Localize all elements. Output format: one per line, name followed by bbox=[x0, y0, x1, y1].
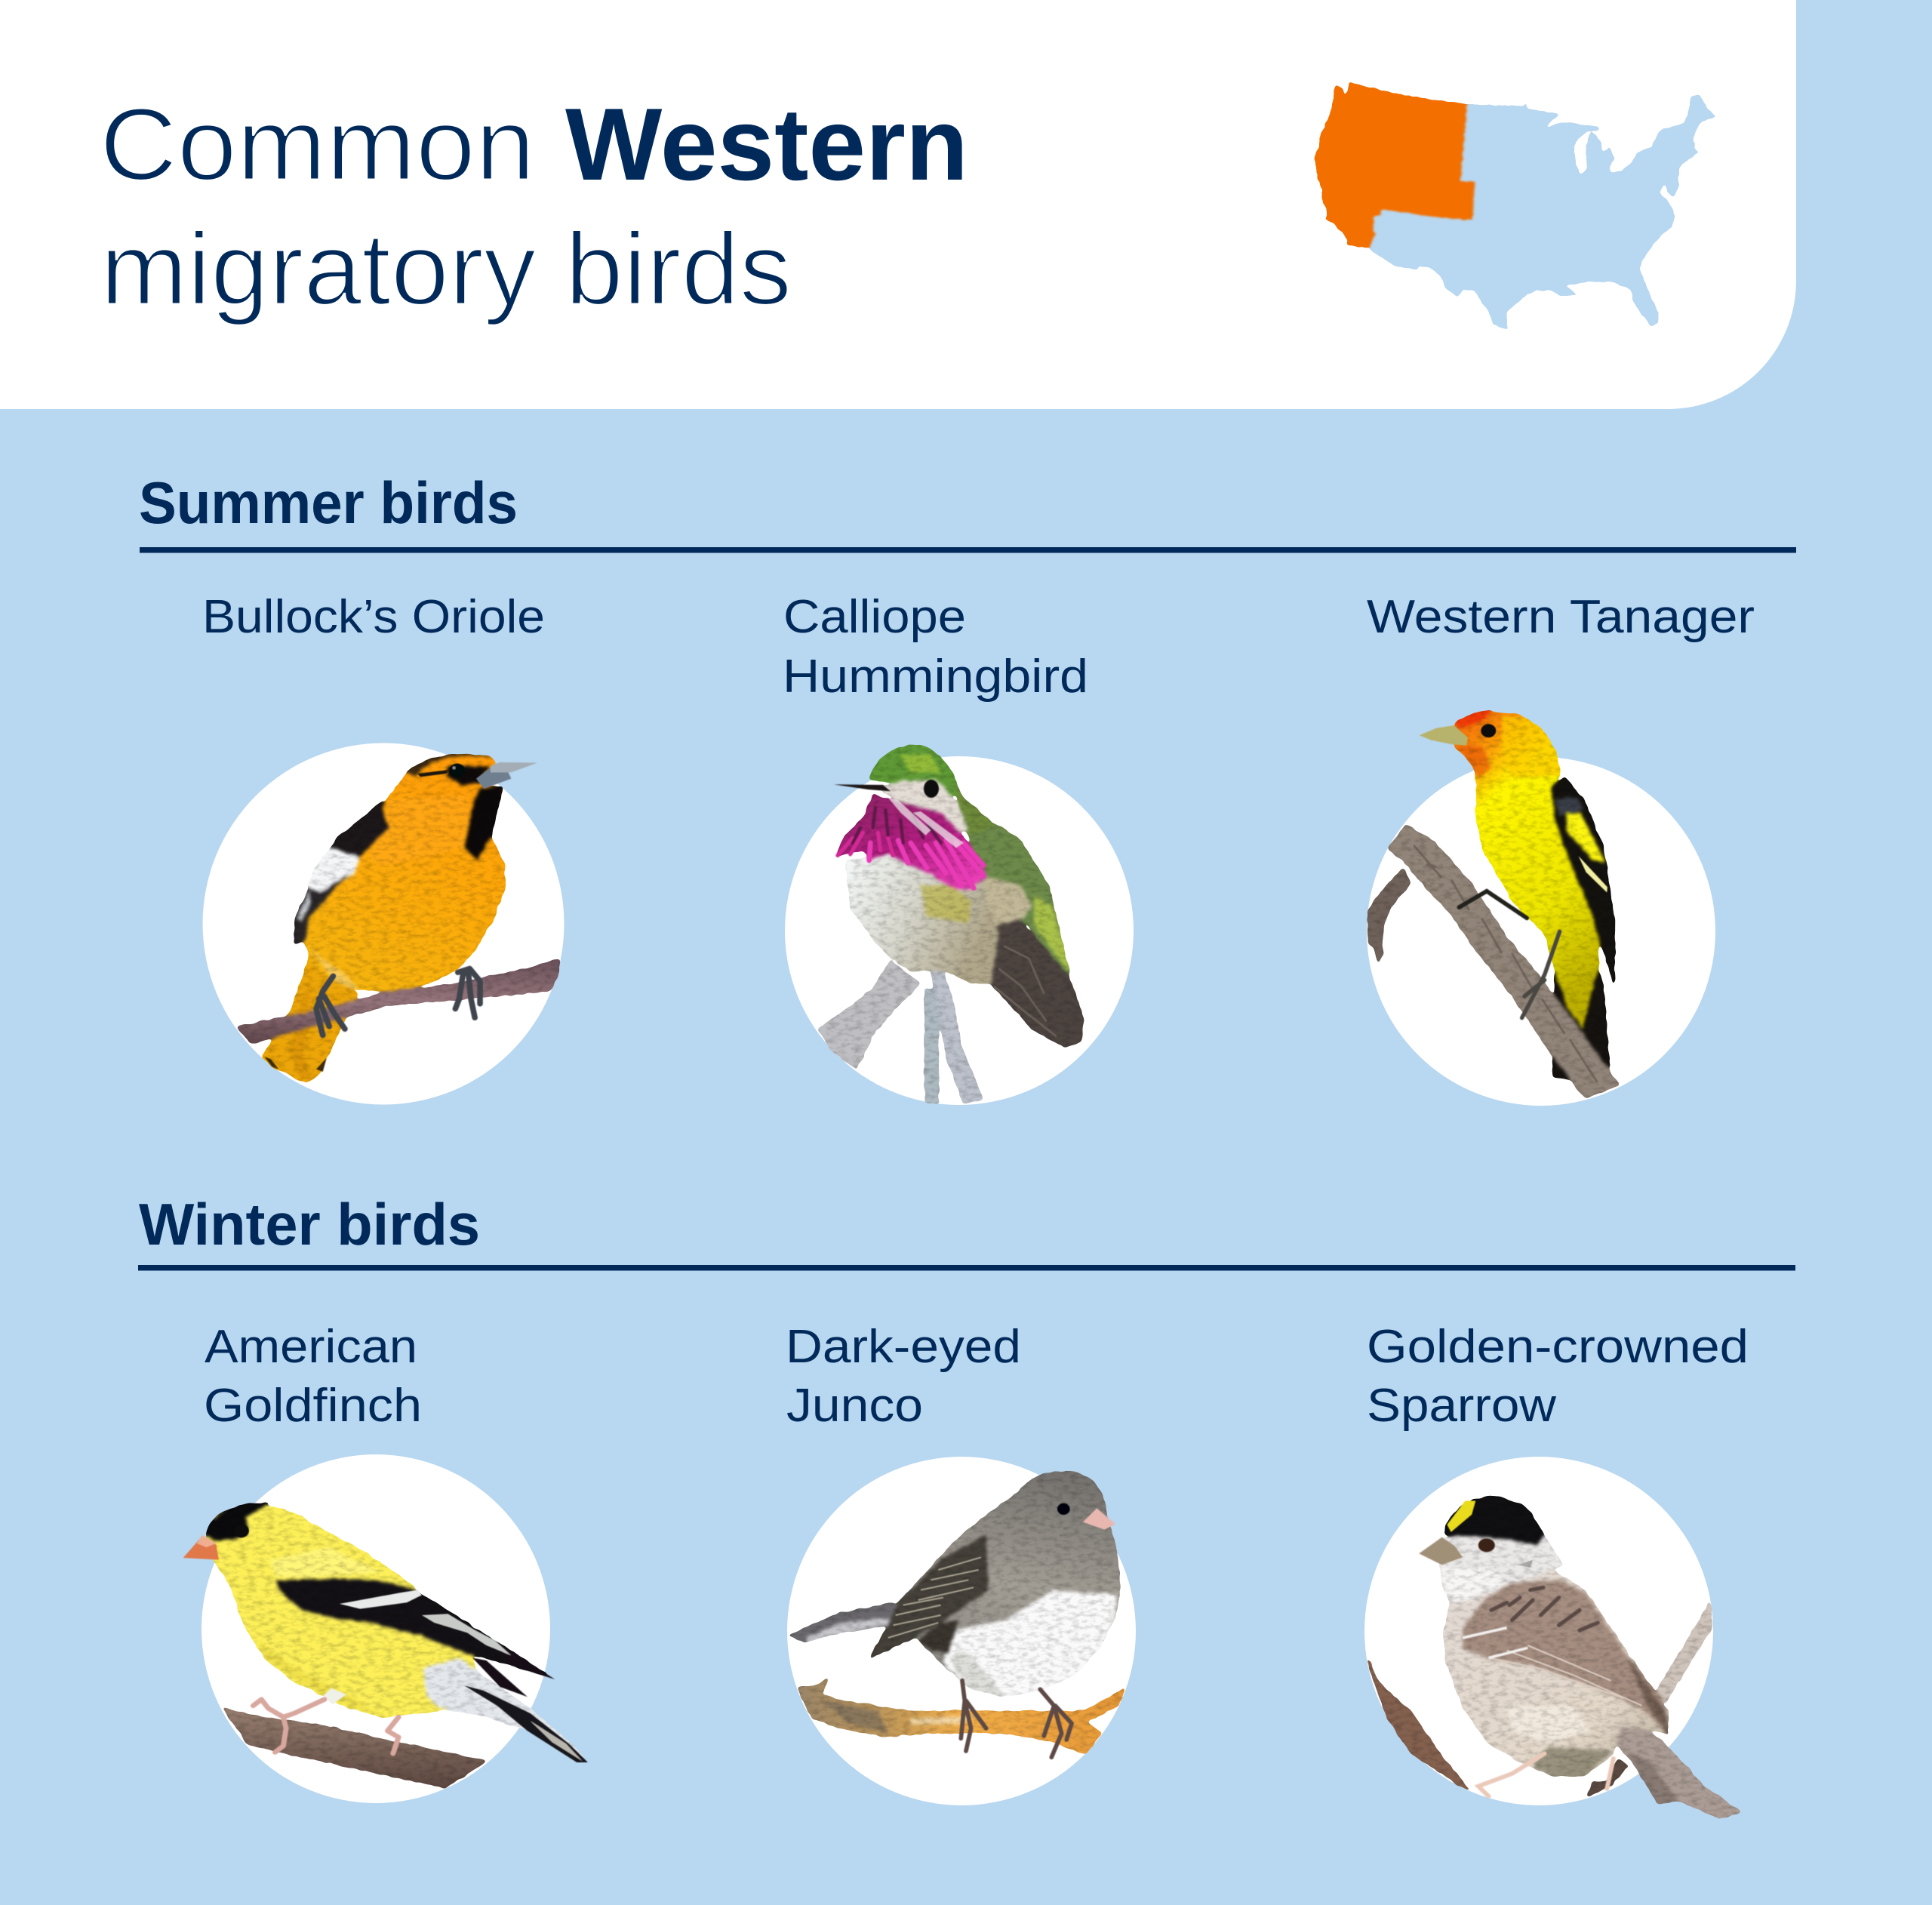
label: Golden-crowned bbox=[1367, 1321, 1749, 1373]
map: western United States highlighted bbox=[1315, 82, 1716, 330]
card: Calliope Hummingbird: Hummingbird bbox=[783, 651, 1088, 703]
label: Calliope bbox=[783, 591, 966, 643]
bird illustration: junco bbox=[787, 1471, 1126, 1757]
header panel bbox=[0, 0, 1796, 409]
card: Calliope Hummingbird bbox=[783, 591, 1134, 1105]
card: Bullock's Oriole bbox=[202, 591, 565, 1105]
bird illustration: tanager bbox=[1367, 710, 1620, 1099]
card: Golden-crowned Sparrow bbox=[1364, 1321, 1749, 1819]
title: migratory birds bbox=[100, 211, 792, 326]
heading: summer birds: Summer birds bbox=[139, 469, 518, 536]
label: Bullock’s Oriole bbox=[202, 591, 545, 643]
bird illustration: hummingbird bbox=[817, 745, 1084, 1104]
label: Western Tanager bbox=[1367, 591, 1755, 643]
title bbox=[100, 87, 968, 326]
label: Dark-eyed bbox=[786, 1321, 1021, 1373]
card: Golden-crowned Sparrow: Sparrow bbox=[1367, 1380, 1556, 1432]
section: summer birds bbox=[139, 469, 1796, 1106]
title: Western bbox=[565, 87, 968, 202]
bird illustration: oriole bbox=[235, 754, 561, 1083]
title: Common bbox=[100, 87, 535, 202]
card: American Goldfinch: Goldfinch bbox=[204, 1380, 422, 1432]
label: American bbox=[205, 1321, 417, 1373]
section: winter birds bbox=[138, 1191, 1795, 1819]
card: American Goldfinch bbox=[183, 1321, 589, 1803]
card: Western Tanager bbox=[1367, 591, 1755, 1106]
card: Dark-eyed Junco bbox=[786, 1321, 1136, 1805]
card: Dark-eyed Junco: Junco bbox=[786, 1380, 923, 1432]
bird illustration: goldfinch bbox=[183, 1503, 589, 1788]
bird illustration: sparrow bbox=[1365, 1496, 1743, 1819]
heading: winter birds: Winter birds bbox=[139, 1191, 480, 1257]
